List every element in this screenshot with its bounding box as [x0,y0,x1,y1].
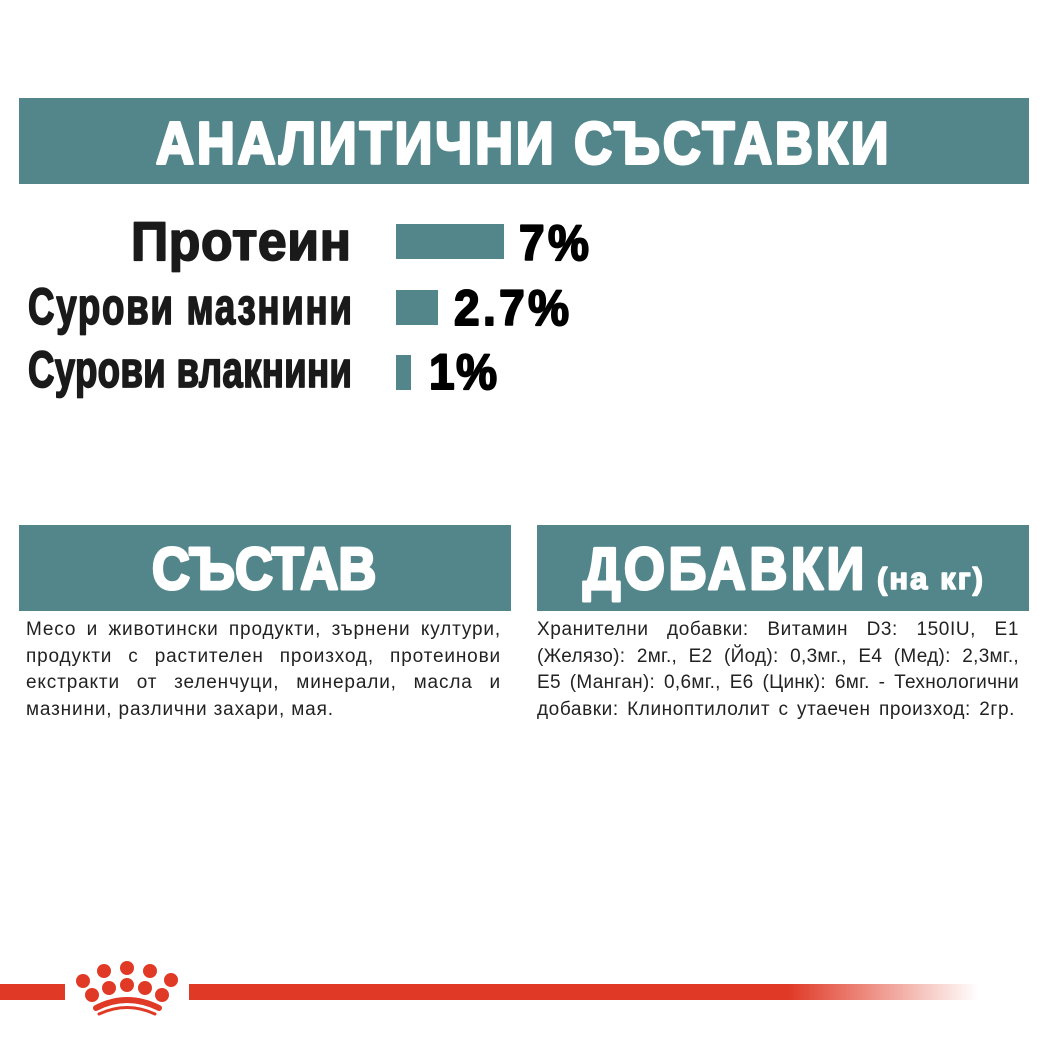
composition banner: СЪСТАВ [152,535,376,602]
red footer line [0,984,978,1000]
composition text: Месо и животински продукти, зърнени култури, [26,619,501,640]
nutrient row: protein: Протеин [131,212,351,272]
additives text: (Желязо): 2мг., Е2 (Йод): 0,3мг., Е4 (Мед): 2,3мг., [537,646,1019,667]
nutrient row: crude fibre: Сурови влакнини [28,342,352,398]
nutrient row: crude fat [28,279,569,336]
nutrient row: crude fibre [28,342,497,400]
additives text: Е5 (Манган): 0,6мг., Е6 (Цинк): 6мг. - Технологични [537,672,1019,693]
composition text: екстракти от зеленчуци, минерали, масла и [26,672,501,693]
additives text [537,619,1019,720]
composition banner [19,525,511,611]
nutrient row: crude fat: Сурови мазнини [28,279,352,335]
title banner [19,98,1029,184]
additives text: добавки: Клиноптилолит с утаечен произход: 2гр. [537,699,1015,720]
additives banner: ДОБАВКИ [583,535,864,602]
composition text: мазнини, различни захари, мая. [26,699,334,720]
icon: royal canin crown [76,961,178,1014]
nutrient row: crude fibre: 1% [429,345,497,400]
title banner: АНАЛИТИЧНИ СЪСТАВКИ [156,110,888,176]
nutrient row: crude fat: 2.7% [454,281,569,336]
composition text [26,619,501,720]
additives banner [537,525,1029,611]
additives text: Хранителни добавки: Витамин D3: 150IU, E1 [537,619,1019,640]
nutrient row: protein: 7% [519,216,589,271]
additives banner: (на кг) [877,561,983,596]
nutrient row: protein [131,212,589,272]
composition text: продукти с растителен произход, протеинови [26,646,501,667]
